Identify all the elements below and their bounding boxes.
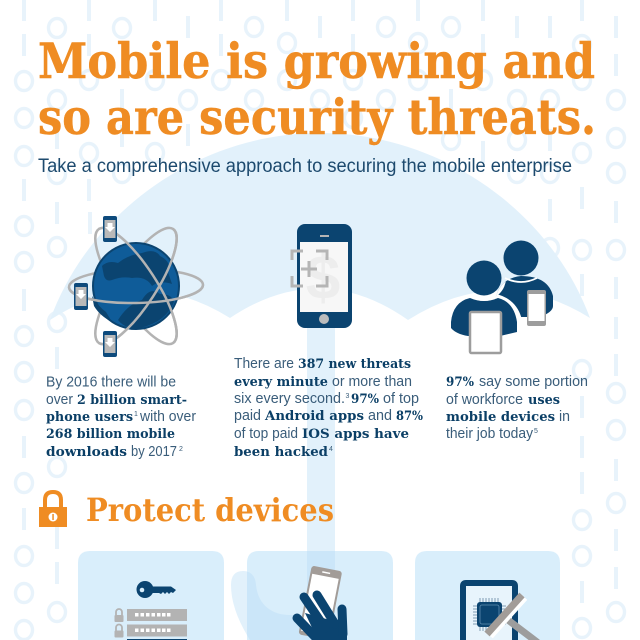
text: smartphone users stat: 1 [134, 411, 138, 418]
text: new threats stat: 87% [396, 408, 423, 423]
password rows [114, 609, 187, 640]
text: workforce stat: their job today [446, 426, 534, 442]
text: smartphone users stat: downloads [46, 444, 127, 459]
title: Mobile is growing and [38, 32, 595, 90]
text: smartphone users stat: by 2017 [131, 444, 177, 460]
text: workforce stat: 97% [446, 374, 474, 389]
text: workforce stat: uses [528, 392, 560, 407]
text: smartphone users stat: phone users [46, 409, 133, 424]
icon: hand [297, 595, 347, 640]
text: smartphone users stat: 2 billion smart- [77, 392, 187, 407]
text: workforce stat: of workforce [446, 392, 523, 408]
icon: globe with orbiting phones [69, 216, 203, 357]
text: new threats stat: been hacked [234, 444, 328, 459]
icon: chip [473, 598, 506, 631]
icon: phone with scanned dollar threat [292, 224, 352, 328]
text: workforce stat: mobile devices [446, 409, 555, 424]
text: new threats stat: of top [383, 391, 419, 407]
text: new threats stat: There are [234, 356, 294, 372]
panel: password protection [78, 551, 224, 640]
text: new threats stat: or more than [332, 374, 412, 390]
heading: protect devices: Protect devices [86, 492, 334, 529]
text: new threats stat: 4 [329, 446, 333, 453]
text: smartphone users stat: By 2016 there will be [46, 374, 176, 390]
umbrella handle seen through the panel [247, 551, 335, 640]
icon: squeegee [487, 595, 537, 640]
text: smartphone users stat: over [46, 392, 73, 408]
icon: phone with scanned dollar threat: $ [306, 244, 340, 313]
text: workforce stat: in [559, 409, 570, 425]
text: smartphone users stat: 268 billion mobile [46, 426, 175, 441]
icon: orange padlock [39, 492, 67, 527]
text: new threats stat: 97% [351, 391, 379, 406]
text: new threats stat: Android apps [264, 408, 364, 423]
panel: hand holding phone [231, 551, 393, 640]
text: new threats stat: six every second. [234, 391, 345, 407]
text: new threats stat: paid [234, 408, 261, 424]
title [38, 32, 596, 146]
text: workforce stat: say some portion [479, 374, 588, 390]
icon: two people with tablet and phone [446, 240, 553, 353]
subtitle: Take a comprehensive approach to securing the mobile enterprise [38, 156, 572, 177]
text: new threats stat: of top paid [234, 426, 298, 442]
text: workforce stat: 5 [534, 428, 538, 435]
text: smartphone users stat: 2 [179, 446, 183, 453]
text: new threats stat: IOS apps have [302, 426, 409, 441]
icon: key [136, 581, 176, 598]
icon: tablet frame [463, 583, 515, 640]
icon: phone [298, 566, 342, 640]
text: new threats stat: every minute [234, 374, 328, 389]
text: new threats stat: 387 new threats [298, 356, 411, 371]
text: smartphone users stat: with over [139, 409, 196, 425]
umbrella canopy, pole and handle [50, 133, 590, 640]
text: new threats stat: 3 [346, 393, 350, 400]
text: new threats stat: and [368, 408, 392, 424]
panel: wipe device [415, 551, 560, 640]
